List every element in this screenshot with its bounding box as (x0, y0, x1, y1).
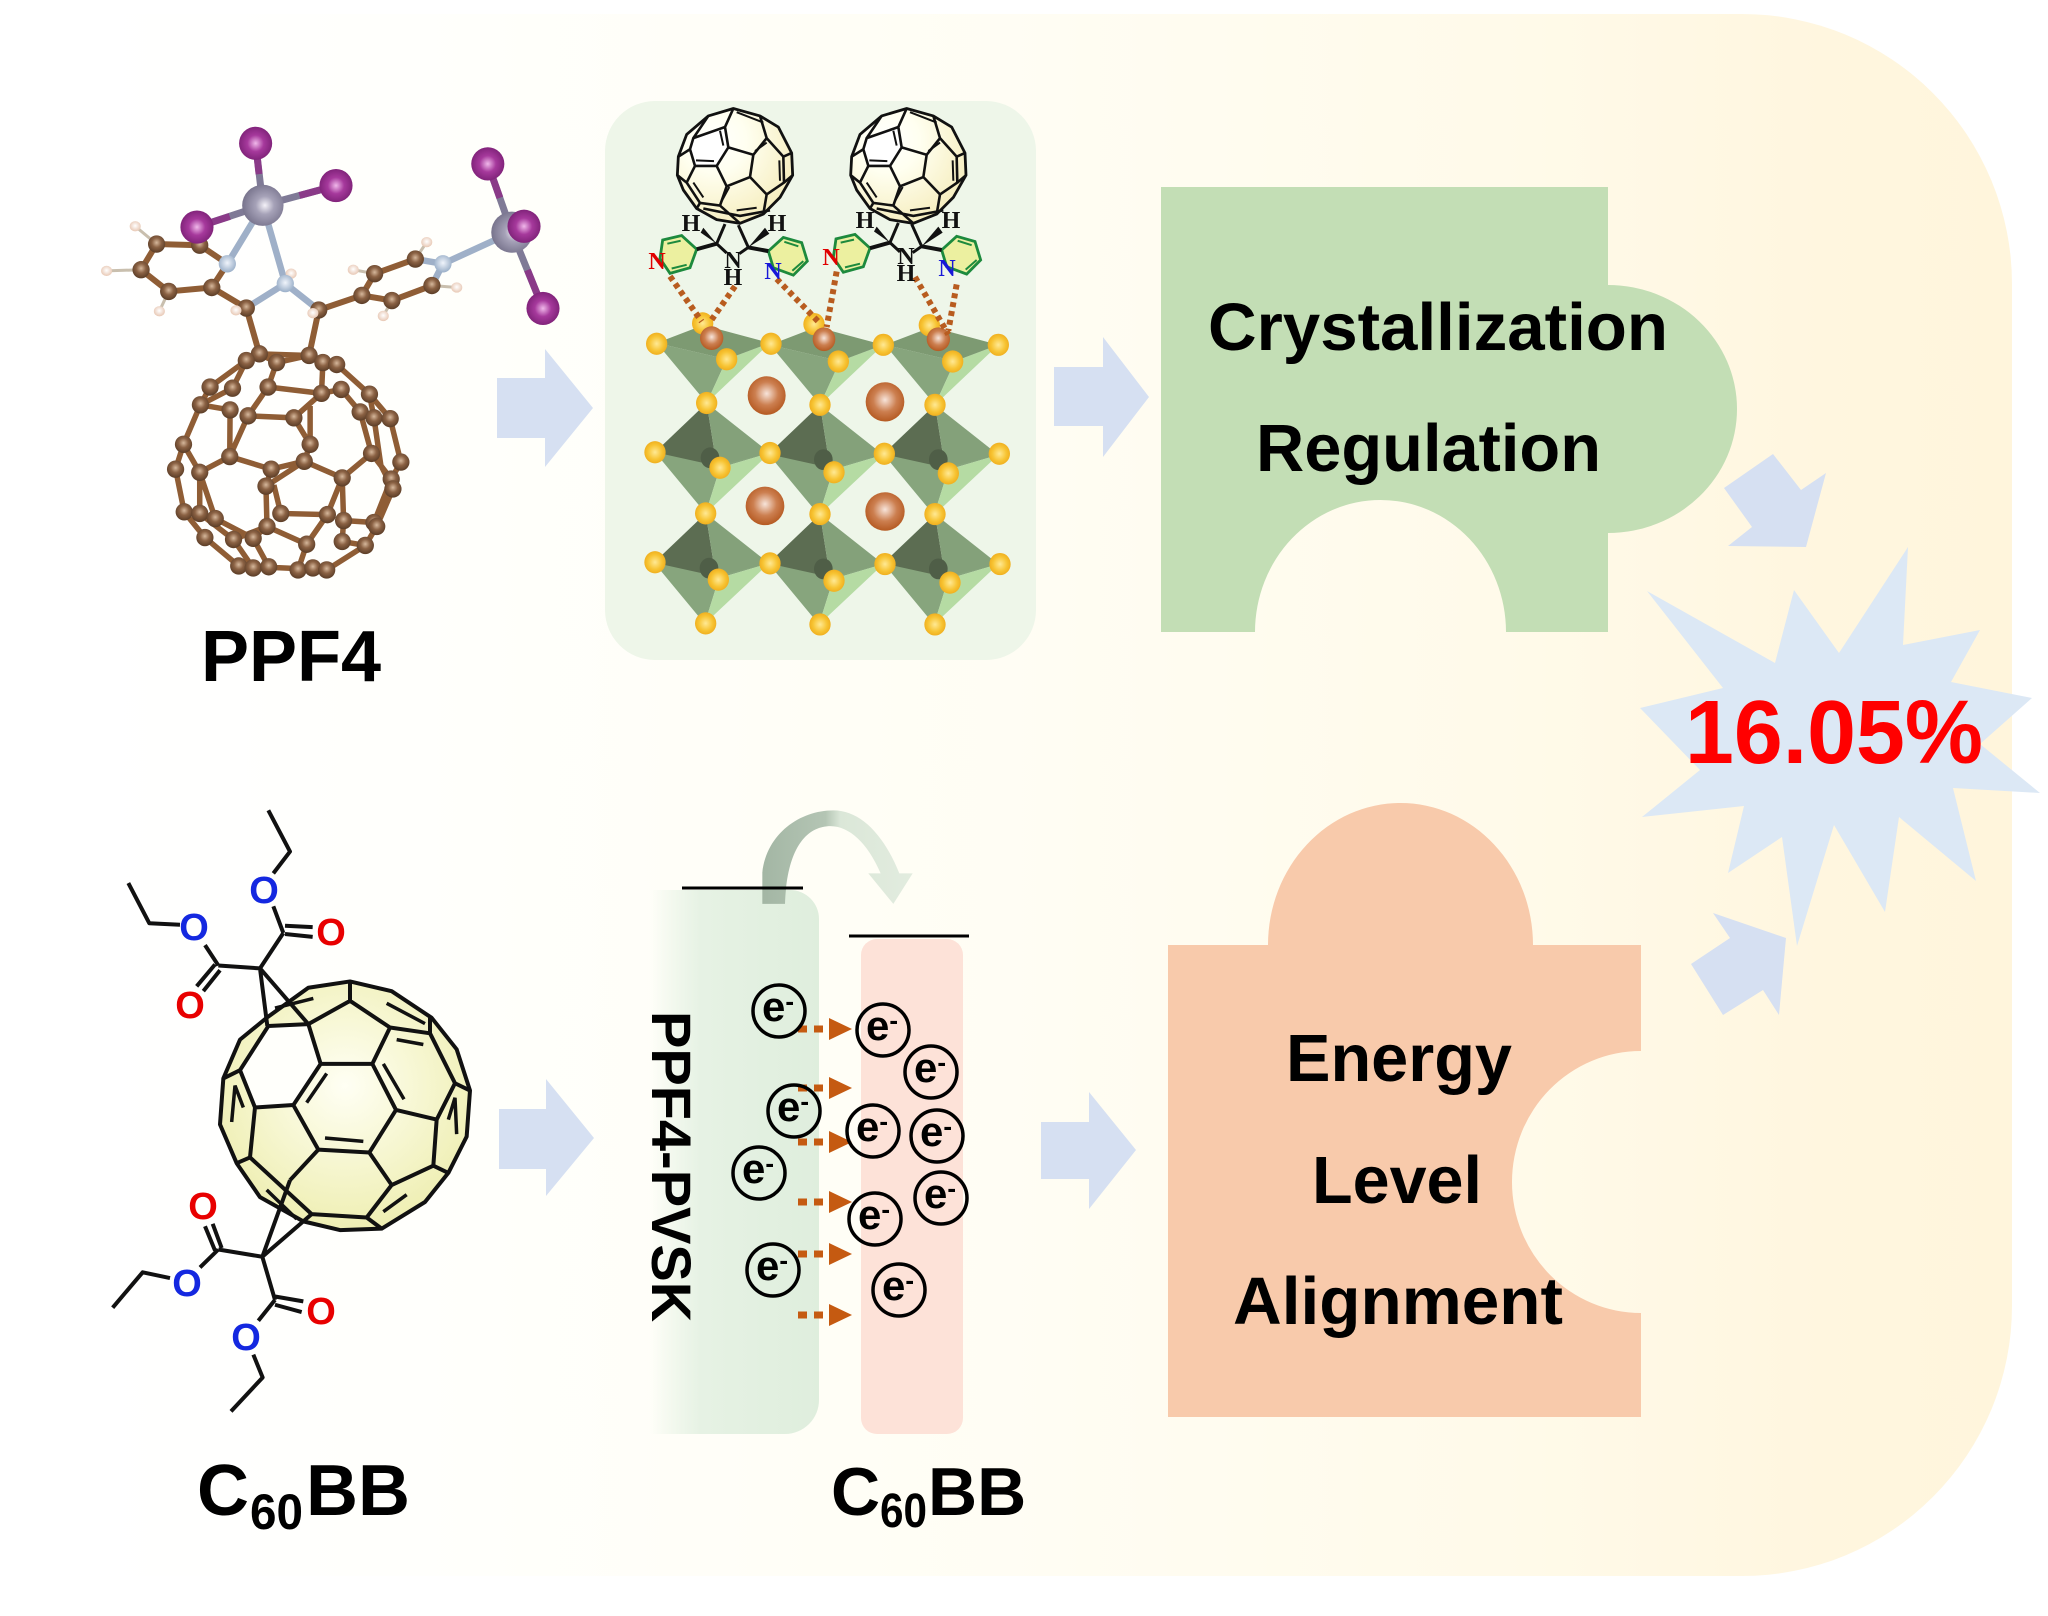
cage atoms (167, 345, 409, 579)
electron labels: - (889, 1005, 898, 1035)
electron labels: e (924, 1170, 947, 1217)
arrow: crystallization to efficiency (1724, 454, 1826, 547)
oxygen labels: O (306, 1291, 336, 1333)
cage (220, 981, 470, 1230)
oxygen labels: O (175, 985, 205, 1027)
starburst with efficiency (1640, 547, 2040, 946)
atom labels: N (648, 249, 666, 275)
label: C60BB: C (197, 1451, 249, 1531)
dashed transfer arrows (798, 1018, 852, 1326)
oxygen labels: O (316, 912, 346, 954)
ligand bonds (141, 244, 432, 355)
label: PPF4: PPF4 (201, 617, 381, 697)
electron labels (742, 983, 956, 1309)
electron labels: e (777, 1083, 800, 1130)
oxygen labels: O (249, 870, 279, 912)
oxygen labels: O (179, 907, 209, 949)
arrow: perovskite to crystallization (1054, 337, 1149, 457)
electron labels: - (943, 1111, 952, 1141)
label: C60BB layer: BB (928, 1454, 1026, 1530)
panel: PPF4 molecule (101, 127, 560, 579)
electron labels: e (856, 1103, 879, 1150)
atom labels: H (724, 265, 743, 291)
electron labels: - (879, 1106, 888, 1136)
electrons (733, 985, 967, 1316)
PPF4-PVSK layer (650, 890, 819, 1434)
energy level lines (682, 888, 969, 936)
electron labels: e (920, 1108, 943, 1155)
fullerene and pyrrolidine units (660, 109, 981, 275)
label: PPF4-PVSK: PPF4-PVSK (640, 1011, 703, 1322)
electron labels: - (800, 1086, 809, 1116)
atom labels: H (768, 211, 787, 237)
atom labels (648, 208, 961, 291)
arrow: C60BB to energy diagram (499, 1079, 594, 1196)
value: 16.05%: 16.05% (1685, 683, 1983, 783)
atom labels: N (764, 259, 782, 285)
label: C60BB layer: C (831, 1454, 880, 1530)
atom labels: H (897, 261, 916, 287)
heading: Level: Level (1312, 1143, 1482, 1218)
electron labels: e (742, 1145, 765, 1192)
electron labels: - (947, 1173, 956, 1203)
label: C60BB layer: 60 (880, 1485, 927, 1538)
atom labels: N (724, 248, 742, 274)
electron labels: - (779, 1245, 788, 1275)
dotted interactions (670, 271, 957, 334)
heading: Energy: Energy (1286, 1021, 1512, 1096)
atom labels: N (897, 244, 915, 270)
heading: Alignment: Alignment (1233, 1264, 1563, 1339)
electron labels: - (765, 1148, 774, 1178)
panel: energy level diagram (640, 810, 1026, 1538)
oxygen labels (172, 870, 346, 1359)
atom labels: N (822, 245, 840, 271)
rear iodine and A-site atoms (692, 312, 950, 531)
electron labels: - (785, 986, 794, 1016)
heading: Crystallization: Crystallization (1208, 290, 1668, 365)
perovskite lattice and molecules (644, 109, 1011, 636)
puzzle piece: Energy Level Alignment (1168, 803, 1641, 1417)
heading: Regulation: Regulation (1256, 411, 1601, 486)
electron labels: - (937, 1047, 946, 1077)
oxygen labels: O (231, 1317, 261, 1359)
atom labels: H (942, 208, 961, 234)
electron labels: e (914, 1044, 937, 1091)
label: C60BB: BB (306, 1451, 410, 1531)
puzzle piece: Crystallization Regulation (1161, 187, 1737, 632)
arrow: energy alignment to efficiency (1691, 913, 1786, 1015)
electron labels: e (866, 1002, 889, 1049)
SnI3 groups (180, 127, 560, 325)
electron labels: e (756, 1242, 779, 1289)
electron labels: - (905, 1265, 914, 1295)
electron labels: e (858, 1191, 881, 1238)
C60 cage bonds (176, 354, 401, 570)
oxygen labels: O (172, 1263, 202, 1305)
oxygen labels: O (188, 1186, 218, 1228)
electron labels: - (881, 1194, 890, 1224)
white top-left face (240, 1024, 321, 1107)
atom labels: H (682, 211, 701, 237)
electron labels: e (762, 983, 785, 1030)
panel: C60BB molecule (113, 810, 470, 1411)
curved transfer arrow (762, 810, 913, 904)
arrow: diagram to energy alignment (1041, 1092, 1136, 1209)
gold atoms (644, 333, 1011, 636)
ligand atoms (101, 221, 462, 321)
atom labels: N (938, 256, 956, 282)
panel: perovskite with PPF4 (605, 101, 1036, 660)
atom labels: H (856, 208, 875, 234)
arrow: PPF4 to perovskite (497, 349, 593, 467)
ester arms (113, 810, 313, 1411)
C60BB layer (861, 939, 963, 1434)
label: C60BB: 60 (250, 1484, 303, 1540)
electron labels: e (882, 1262, 905, 1309)
